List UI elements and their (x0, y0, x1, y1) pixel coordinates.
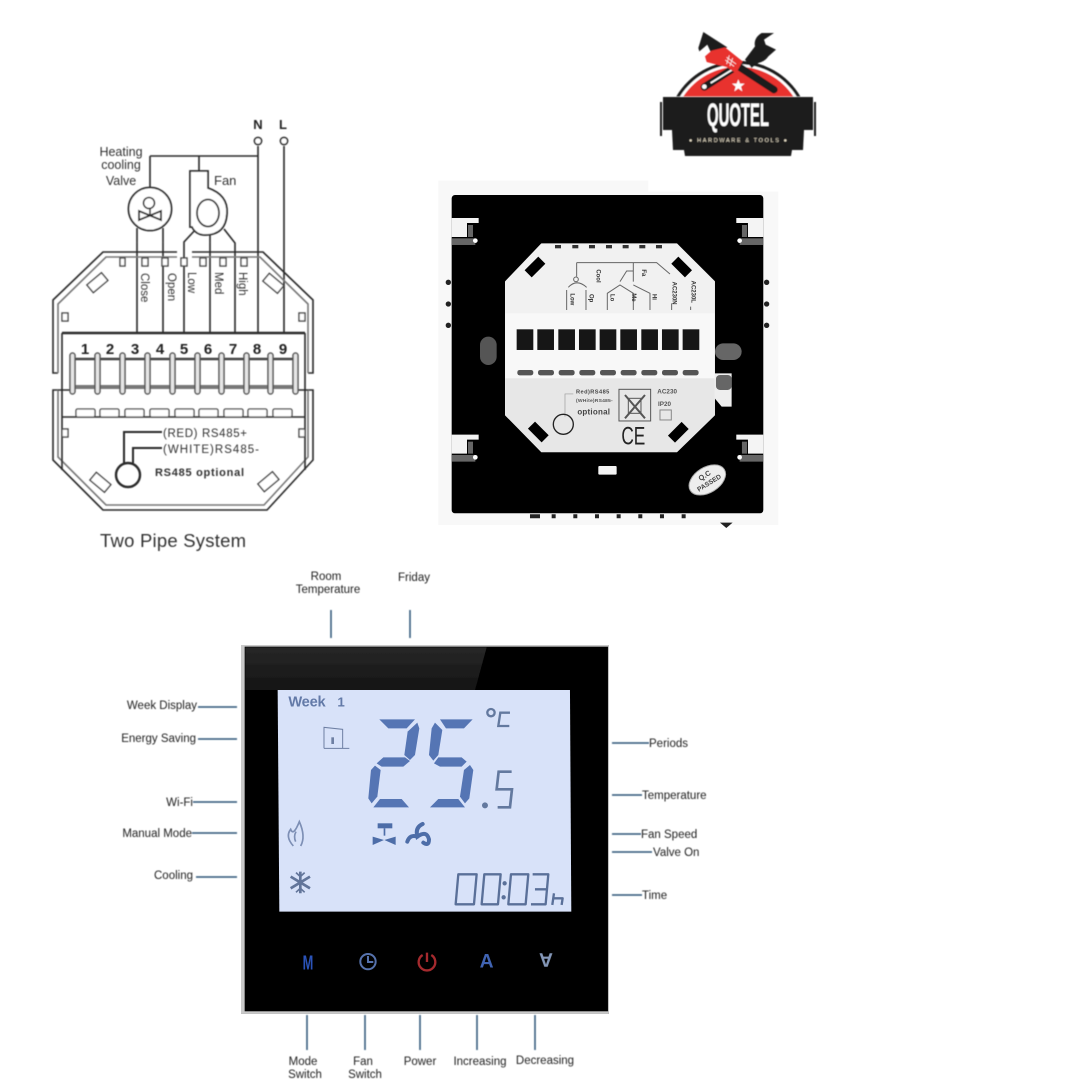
button: clock (360, 954, 376, 969)
label: N terminal: N (253, 117, 263, 132)
decimal digit (483, 772, 512, 807)
side clips (446, 280, 769, 528)
RS485 labels: (WHITE)RS485- (163, 444, 259, 456)
label: week display: Week Display (127, 700, 197, 712)
RS485 labels (155, 428, 259, 479)
black glass (245, 647, 608, 1011)
label: fan speed: Fan Speed (641, 829, 697, 841)
white frame (438, 181, 778, 525)
terminal numbers: 9 (279, 341, 287, 358)
wire labels: Close (138, 273, 150, 302)
LCD screen (278, 690, 571, 912)
wire labels: Med (212, 272, 224, 294)
printed CE mark: CE (621, 423, 645, 450)
terminal numbers: 3 (131, 341, 139, 358)
diagram caption: Two Pipe System (100, 530, 246, 551)
printed rating (657, 388, 677, 420)
side latches (480, 337, 742, 407)
printed RS485 note: (WHite)RS485- (576, 398, 613, 404)
label: L terminal: L (279, 117, 287, 132)
wiring diagram: two pipe system (53, 117, 313, 551)
board top dimples (555, 245, 662, 248)
icon: valve (373, 823, 396, 845)
terminal numbers: 5 (180, 341, 188, 358)
device back view (438, 181, 778, 528)
callout leader lines (192, 610, 652, 1050)
wire labels: High (236, 272, 248, 296)
printed RS485 note (553, 389, 613, 434)
printed RS485 note: Red)RS485 (576, 389, 609, 395)
printed wire labels: Hi (651, 294, 657, 300)
printed wire labels: Me (630, 293, 636, 302)
sticker: QC passed: Q.C (697, 468, 713, 483)
terminal numbers (81, 341, 287, 358)
callouts: control labels (121, 571, 707, 1080)
glass reflection (245, 647, 487, 690)
icon: L connector (280, 137, 288, 145)
mounting tabs (62, 258, 305, 492)
terminal block (70, 353, 298, 417)
button: decrease: A (539, 948, 553, 969)
icon: snowflake (291, 872, 310, 893)
icon: fan motor (190, 171, 227, 235)
button: power (419, 953, 435, 970)
label: fan: Fan (214, 173, 236, 188)
RS485 labels: RS485 optional (155, 467, 244, 479)
housing outline (53, 252, 313, 510)
printed wire labels: AC230N (671, 282, 677, 305)
terminal numbers: 2 (106, 341, 114, 358)
terminal band (505, 313, 715, 378)
printed wire labels: Fa (640, 269, 646, 277)
terminal numbers: 8 (253, 341, 261, 358)
label: increasing: Increasing (453, 1056, 507, 1068)
button: increase: A (480, 951, 494, 972)
icon: dome and crossed tools (676, 32, 800, 96)
logo: Quotel hardware and tools (660, 32, 816, 156)
label: temperature: Temperature (642, 790, 707, 802)
label: heating cooling valve: Valve (106, 174, 136, 188)
logo: Quotel hardware and tools: QUOTEL (707, 97, 769, 133)
label: valve on: Valve On (653, 847, 699, 859)
label: energy saving: Energy Saving (121, 733, 196, 745)
week indicator: Week (288, 695, 327, 711)
icon: fan (407, 824, 429, 844)
wire labels (138, 272, 248, 302)
terminal numbers: 7 (229, 341, 237, 358)
wire labels: Low (185, 272, 197, 294)
terminal numbers: 6 (204, 341, 212, 358)
wire labels: Open (165, 273, 177, 301)
label: time: Time (642, 890, 667, 902)
label: room temperature: Temperature (296, 584, 360, 596)
degrees Celsius (487, 709, 510, 726)
printed wire labels: AC230L (689, 281, 695, 303)
week indicator: 1 (337, 695, 345, 710)
terminal screws (517, 370, 699, 375)
printed RS485 note: optional (577, 407, 610, 416)
printed wire labels: Op (588, 294, 594, 303)
printed wire labels: Cool (594, 269, 600, 283)
label: heating cooling valve: Heating (99, 145, 143, 159)
printed rating: AC230 (657, 388, 677, 395)
label: periods: Periods (649, 738, 688, 750)
icon: flame (288, 822, 303, 846)
mounting notches (452, 218, 763, 475)
RS485 connector (116, 432, 162, 487)
device front view (241, 645, 609, 1014)
label: decreasing: Decreasing (516, 1055, 574, 1067)
label: room temperature: Room (311, 571, 341, 583)
board corner slots (525, 257, 692, 443)
banner (660, 97, 816, 156)
silver frame (241, 645, 609, 1014)
printed rating: IP20 (658, 401, 671, 408)
logo tagline: ● HARDWARE & TOOLS ● (689, 138, 787, 144)
label: Friday: Friday (398, 572, 430, 584)
button: mode: M (303, 951, 313, 974)
icon: valve (128, 188, 172, 230)
sticker: QC passed (684, 459, 731, 501)
RS485 labels: (RED) RS485+ (163, 428, 247, 440)
temperature digits (368, 719, 473, 807)
label: fan switch: Fan (353, 1056, 373, 1068)
terminal board (506, 244, 714, 452)
terminal numbers: 1 (81, 341, 89, 358)
icon: waste bin mark (619, 389, 651, 421)
printed wire labels: Lo (609, 294, 615, 302)
printed wiring diagram (567, 263, 691, 310)
icon: N connector (254, 137, 262, 145)
printed wire labels (569, 269, 695, 306)
label: power: Power (404, 1056, 436, 1068)
lower board shade (505, 378, 715, 452)
sticker: QC passed: PASSED (696, 473, 723, 494)
terminal openings (517, 329, 699, 350)
terminal numbers: 4 (156, 341, 165, 358)
label: heating cooling valve: cooling (101, 158, 141, 172)
label: cooling: Cooling (154, 870, 193, 882)
label: mode switch: Mode (289, 1056, 317, 1068)
week indicator (288, 695, 345, 711)
clock readout (456, 874, 563, 905)
printed wire labels: Low (569, 293, 575, 306)
label: manual mode: Manual Mode (122, 828, 192, 840)
supply wiring (137, 146, 284, 333)
black back plate (452, 195, 763, 513)
label: Wi-Fi: Wi-Fi (166, 797, 193, 809)
icon: home temperature (324, 727, 349, 748)
